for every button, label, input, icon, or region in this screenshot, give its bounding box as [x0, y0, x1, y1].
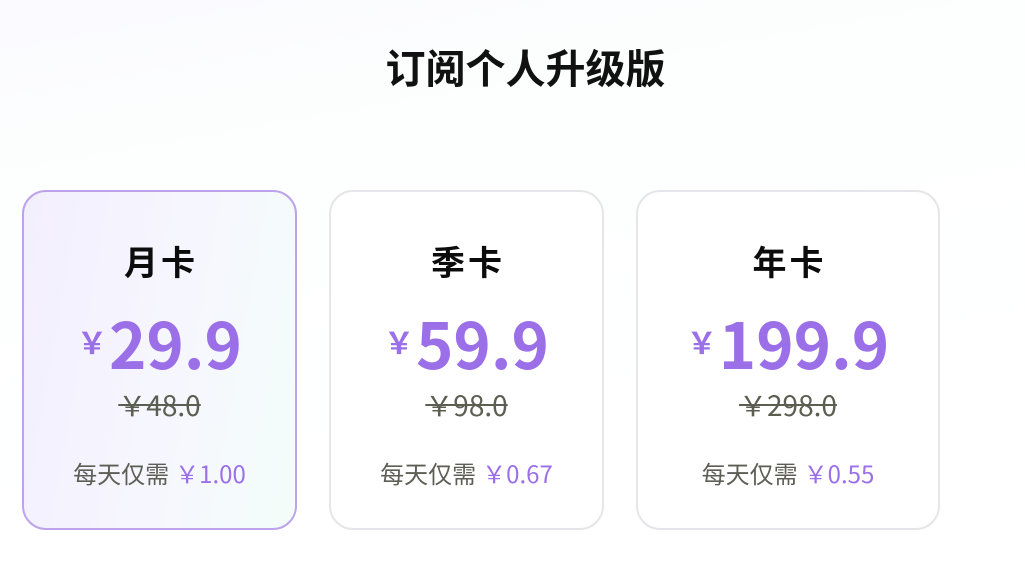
panel: monthly plan	[22, 190, 297, 530]
price: monthly: ￥29.9	[77, 296, 242, 388]
original price: monthly: ￥48.0	[118, 385, 201, 425]
daily price: annual: 每天仅需￥0.55	[702, 455, 874, 490]
original price: quarterly: ￥98.0	[425, 385, 508, 425]
original price: annual: ￥298.0	[739, 385, 837, 425]
panel: quarterly plan	[329, 190, 604, 530]
daily price: monthly: 每天仅需￥1.00	[73, 455, 246, 490]
plan name: monthly: 月卡	[124, 236, 198, 285]
title: 订阅个人升级版	[386, 37, 666, 95]
price: annual: ￥199.9	[687, 296, 889, 388]
panel: annual plan	[636, 190, 940, 530]
daily price: quarterly: 每天仅需￥0.67	[380, 455, 553, 490]
price: quarterly: ￥59.9	[384, 296, 549, 388]
plan name: annual: 年卡	[752, 236, 826, 285]
plan name: quarterly: 季卡	[431, 236, 505, 285]
